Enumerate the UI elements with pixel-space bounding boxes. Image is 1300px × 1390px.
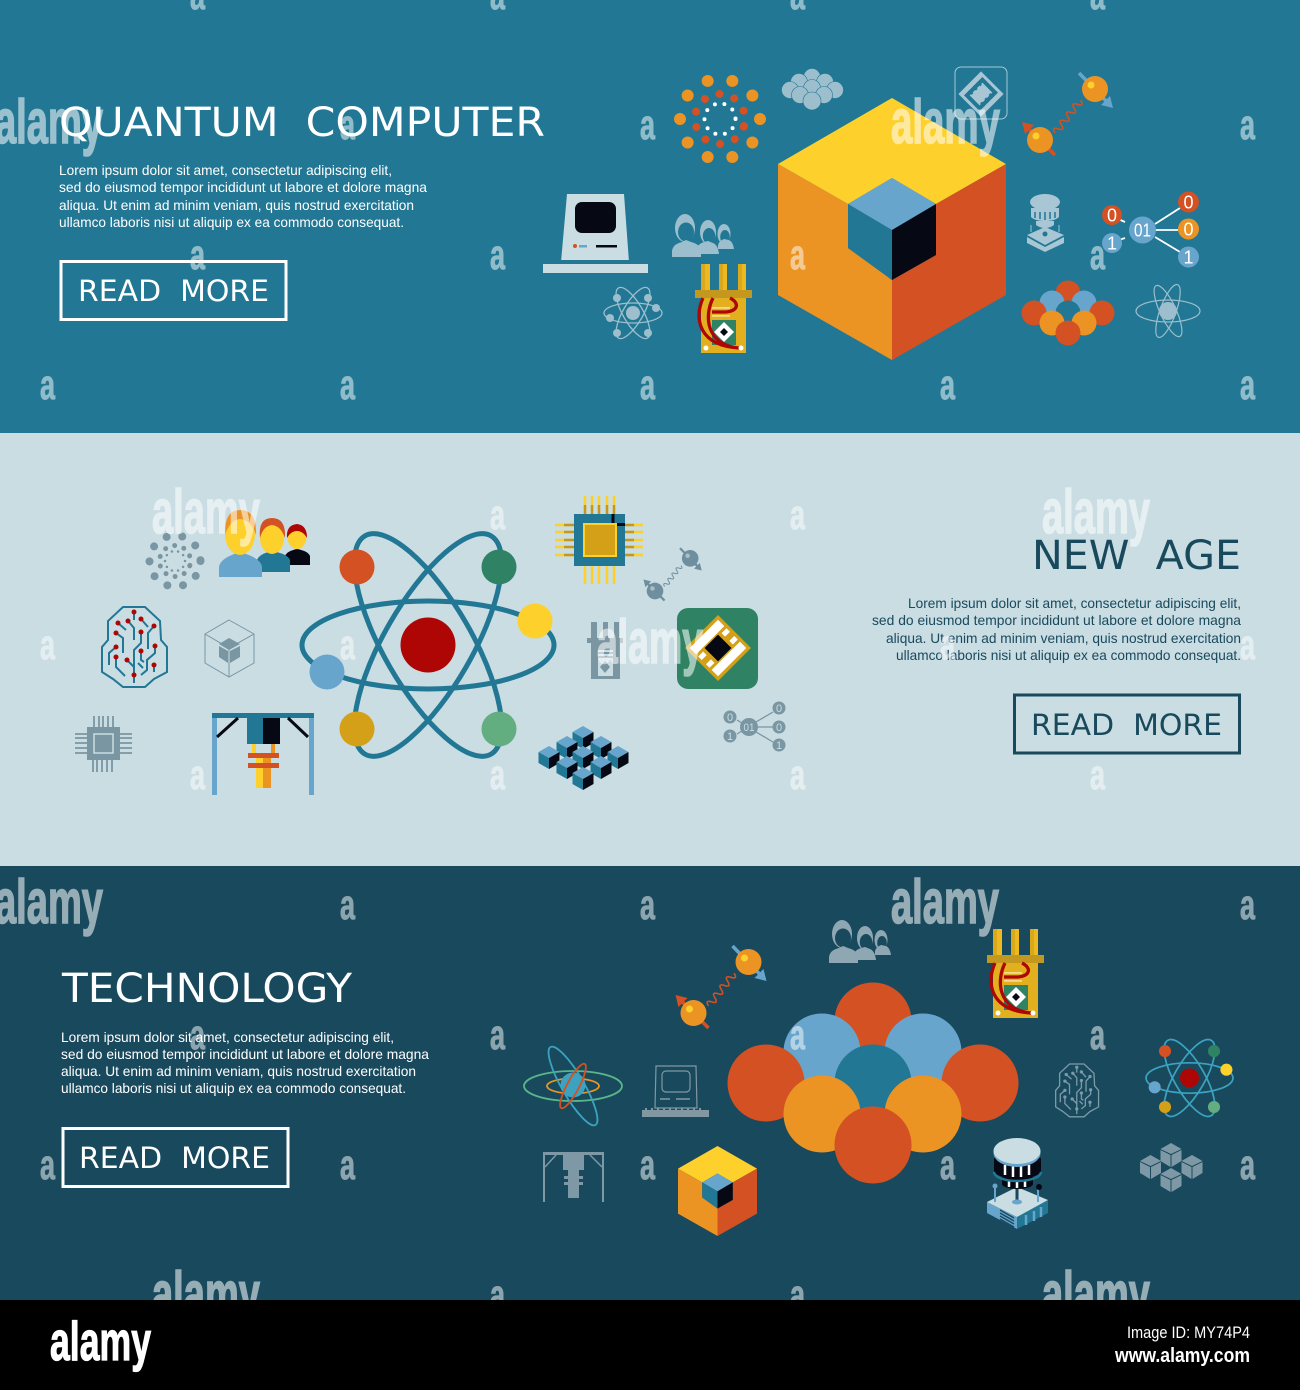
icon: people group <box>672 214 734 257</box>
watermarks: a <box>1240 361 1255 408</box>
button: read more: READ MORE <box>79 1141 270 1175</box>
watermarks: a <box>190 1011 205 1058</box>
icon: quantum chip <box>987 929 1044 1018</box>
text block: quantum computer description: ullamco laboris nisi ut aliquip ex ea commodo consequat. <box>59 214 404 230</box>
watermarks: a <box>1090 1011 1105 1058</box>
watermarks: a <box>190 231 205 278</box>
icon: binary network: 0 <box>1107 206 1117 226</box>
icon: grey quantum chip <box>587 622 623 679</box>
icon: binary network: 0 <box>1183 192 1194 212</box>
icon: coloured people <box>219 510 310 577</box>
icon: grey binary network <box>724 702 786 752</box>
watermarks: a <box>490 491 505 538</box>
icon: entangled particles <box>676 946 766 1028</box>
text block: quantum computer description: aliqua. Ut enim ad minim veniam, quis nostrud exercitation <box>59 197 414 213</box>
icon: entangled particles <box>1022 73 1113 155</box>
icon: grey binary network: 0 <box>727 712 733 724</box>
icon: grey computer <box>642 1066 709 1117</box>
watermarks: a <box>340 621 355 668</box>
icon: grey binary network: 0 <box>776 722 782 734</box>
icon: grey binary network: 01 <box>744 722 754 734</box>
watermarks: a <box>1090 231 1105 278</box>
icon: grey machine <box>543 1152 604 1202</box>
footer logo: alamy <box>50 1310 151 1372</box>
watermarks: a <box>40 621 55 668</box>
button: read more <box>63 1128 288 1186</box>
button: read more <box>61 262 286 320</box>
icon: small atom <box>1146 1033 1233 1123</box>
heading: technology: TECHNOLOGY <box>61 966 353 1012</box>
text block: new age description: ullamco laboris nisi ut aliquip ex ea commodo consequat. <box>896 647 1241 663</box>
watermarks: alamy <box>891 88 1000 157</box>
button: read more: READ MORE <box>78 274 269 308</box>
text block: technology description: Lorem ipsum dolor sit amet, consectetur adipiscing elit, <box>61 1029 394 1045</box>
watermarks: alamy <box>891 868 999 937</box>
icon: outlined cube <box>205 620 254 677</box>
icon: orbit outline <box>1136 282 1200 340</box>
icon: grey processor <box>75 716 132 772</box>
watermarks: a <box>1240 101 1255 148</box>
image id: Image ID: MY74P4 <box>1127 1323 1250 1342</box>
icon: chip tile <box>955 67 1007 119</box>
text block: quantum computer description: sed do eiusmod tempor incididunt ut labore et dolore magna <box>59 179 427 195</box>
watermarks: a <box>1240 621 1255 668</box>
icon: dot ring <box>680 79 760 159</box>
watermarks: a <box>190 751 205 798</box>
icon: grey blocks <box>1140 1143 1202 1192</box>
icon: atom outline <box>604 283 662 343</box>
watermarks: alamy <box>1042 1260 1150 1329</box>
icon: particle cluster <box>782 68 844 110</box>
watermarks: a <box>40 361 55 408</box>
watermarks: a <box>790 751 805 798</box>
button: read more <box>1014 695 1240 753</box>
watermarks: a <box>640 361 655 408</box>
icon: grey binary network: 1 <box>727 731 733 743</box>
watermarks: a <box>940 361 955 408</box>
icon: orbit <box>524 1042 622 1130</box>
watermarks: a <box>790 1271 805 1318</box>
icon: large atom <box>302 514 554 776</box>
watermarks: alamy <box>1042 478 1150 547</box>
icon: cryostat <box>1027 194 1064 252</box>
watermarks: a <box>490 1011 505 1058</box>
watermarks: a <box>340 101 355 148</box>
watermarks: a <box>490 231 505 278</box>
text block: quantum computer description <box>59 162 427 230</box>
watermarks: a <box>790 1011 805 1058</box>
text block: technology description: aliqua. Ut enim ad minim veniam, quis nostrud exercitation <box>61 1063 416 1079</box>
heading: new age: NEW AGE <box>1032 533 1241 579</box>
watermarks: a <box>490 1271 505 1318</box>
watermarks: a <box>640 101 655 148</box>
watermarks: a <box>1240 881 1255 928</box>
icon: cryostat coloured <box>987 1138 1048 1229</box>
watermarks: a <box>340 881 355 928</box>
icon: binary network: 01 <box>1134 220 1151 240</box>
icon: big isometric cube <box>778 98 1006 360</box>
watermarks: a <box>490 751 505 798</box>
watermarks: alamy <box>597 608 703 677</box>
watermarks: alamy <box>152 478 260 547</box>
watermarks: a <box>940 621 955 668</box>
icon: binary network <box>1102 192 1199 268</box>
icon: green chip tile <box>677 608 758 689</box>
watermarks: a <box>340 1141 355 1188</box>
text block: technology description <box>61 1029 429 1096</box>
watermarks: a <box>640 881 655 928</box>
icon: grey brain <box>1056 1064 1099 1117</box>
icon: block grid <box>538 726 628 790</box>
watermarks: alamy <box>152 1260 260 1329</box>
watermarks: a <box>40 1141 55 1188</box>
text block: technology description: ullamco laboris nisi ut aliquip ex ea commodo consequat. <box>61 1080 406 1096</box>
watermarks: a <box>940 1141 955 1188</box>
watermarks: a <box>1090 751 1105 798</box>
footer bar <box>0 1300 1300 1390</box>
icon: retro computer <box>543 194 648 273</box>
icon: grey dot ring <box>150 536 200 586</box>
icon: small isometric cube <box>678 1146 757 1236</box>
icon: grey entangled particles <box>643 548 702 601</box>
icon: binary network: 0 <box>1183 220 1194 240</box>
watermarks: a <box>1240 1141 1255 1188</box>
panel: new age <box>0 433 1300 866</box>
icon: circuit brain <box>102 607 167 687</box>
icon: machine <box>212 713 314 795</box>
watermarks: a <box>790 231 805 278</box>
panel: quantum computer <box>0 0 1300 433</box>
watermarks: alamy <box>0 868 103 937</box>
icon: colored processor <box>555 496 643 584</box>
text block: new age description: Lorem ipsum dolor sit amet, consectetur adipiscing elit, <box>908 595 1241 611</box>
button: read more: READ MORE <box>1031 708 1222 742</box>
icon: central circle cluster <box>728 982 1018 1184</box>
icon: circle cluster <box>1022 280 1114 346</box>
watermarks: alamy <box>0 88 103 157</box>
icon: quantum chip <box>695 264 752 353</box>
icon: binary network: 1 <box>1183 248 1194 268</box>
icon: binary network: 1 <box>1107 234 1117 254</box>
text block: quantum computer description: Lorem ipsum dolor sit amet, consectetur adipiscing elit, <box>59 162 392 178</box>
watermarks: a <box>790 491 805 538</box>
watermarks: a <box>340 361 355 408</box>
panel: technology <box>0 866 1300 1300</box>
watermarks: a <box>640 1141 655 1188</box>
heading: quantum computer: QUANTUM COMPUTER <box>59 100 545 146</box>
icon: grey binary network: 1 <box>776 740 782 752</box>
text block: new age description <box>872 595 1241 663</box>
website: www.alamy.com <box>1114 1345 1250 1367</box>
text block: new age description: aliqua. Ut enim ad minim veniam, quis nostrud exercitation <box>886 630 1241 646</box>
icon: grey people <box>829 920 891 963</box>
text block: technology description: sed do eiusmod tempor incididunt ut labore et dolore magna <box>61 1046 429 1062</box>
icon: grey binary network: 0 <box>776 703 782 715</box>
text block: new age description: sed do eiusmod tempor incididunt ut labore et dolore magna <box>872 612 1241 628</box>
